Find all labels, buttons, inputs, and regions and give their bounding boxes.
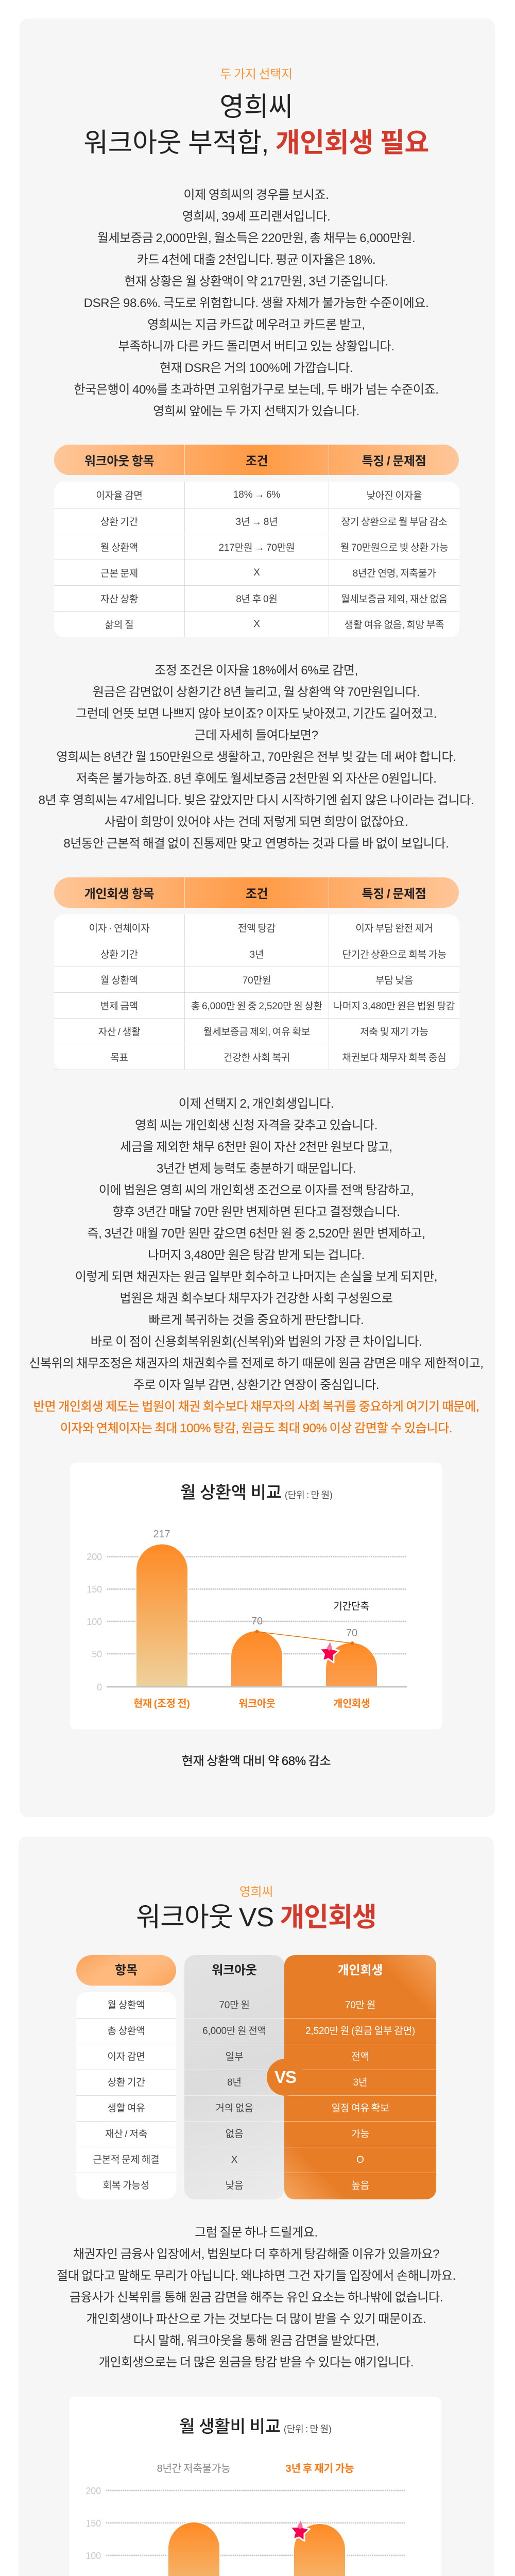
table body: 70만원 <box>243 975 271 986</box>
title: 워크아웃 VS 개인회생: 워크아웃 VS 개인회생 <box>136 1903 376 1933</box>
grid lines and y axis labels <box>85 2486 405 2576</box>
column rows: 2,520만 원 (원금 일부 감면) <box>305 2026 415 2037</box>
text block: 워크아웃 조정 조건: 근데 자세히 들여다보면? <box>194 728 318 742</box>
grid lines and y axis labels: 200 <box>87 1552 102 1562</box>
table body: 총 6,000만 원 중 2,520만 원 상환 <box>191 1001 322 1012</box>
text block: 워크아웃 조정 조건: 8년 후 영희씨는 47세입니다. 빚은 갚았지만 다시 시작하기엔 쉽지 않은 나이라는 겁니다. <box>39 793 474 807</box>
table body: 상환 기간 <box>100 950 138 960</box>
grid lines and y axis labels: 0 <box>97 1682 102 1692</box>
grid lines and y axis labels: 150 <box>85 2518 101 2529</box>
text block: 워크아웃 조정 조건: 그런데 언뜻 보면 나쁘지 않아 보이죠? 이자도 낮아졌고, 기간도 길어졌고. <box>76 707 437 721</box>
table body: 나머지 3,480만 원은 법원 탕감 <box>334 1001 455 1012</box>
table: 개인회생 항목 <box>54 877 459 1070</box>
text block: 금융사 질문: 그럼 질문 하나 드릴게요. <box>195 2226 318 2240</box>
column header: 항목 <box>76 1955 176 1986</box>
grid lines and y axis labels: 200 <box>85 2486 101 2496</box>
comparison table <box>76 1955 436 2199</box>
column rows: 8년 <box>227 2077 242 2088</box>
column rows: 일정 여유 확보 <box>332 2103 389 2114</box>
column header: 워크아웃: 워크아웃 <box>212 1963 257 1977</box>
x axis <box>107 1686 407 1688</box>
text block: 금융사 질문: 다시 말해, 워크아웃을 통해 원금 감면을 받았다면, <box>133 2334 379 2348</box>
grid lines and y axis labels <box>87 1552 406 1692</box>
bar: 워크아웃 70 <box>231 1631 282 1686</box>
text block: 선택지 2 개인회생 설명: 세금을 제외한 채무 6천만 원이 자산 2천만 원보다 많고, <box>120 1140 392 1154</box>
column rows: 70만 원 <box>219 2000 250 2011</box>
column rows: X <box>231 2155 237 2165</box>
column rows: 70만 원 <box>345 2000 375 2011</box>
grid lines and y axis labels: 100 <box>85 2551 101 2561</box>
bar notes <box>157 2463 354 2475</box>
note: 기간단축: 기간단축 <box>333 1601 369 1612</box>
text block: 선택지 2 개인회생 설명: 이에 법원은 영희 씨의 개인회생 조건으로 이자를 전액 탕감하고, <box>99 1183 414 1197</box>
table body: 근본 문제 <box>100 568 138 579</box>
title: 워크아웃 부적합, 개인회생 필요 <box>83 92 429 158</box>
category labels: 워크아웃 <box>238 1698 276 1709</box>
text block: 선택지 2 개인회생 설명: 바로 이 점이 신용회복위원회(신복위)와 법원의 가장 큰 차이입니다. <box>91 1334 422 1349</box>
column rows <box>184 2000 284 2191</box>
text block: 워크아웃 조정 조건 <box>39 664 474 851</box>
bar: 현재 217 <box>136 1544 187 1686</box>
text block: 선택지 2 개인회생 설명: 이렇게 되면 채권자는 원금 일부만 회수하고 나머지는 손실을 보게 되지만, <box>75 1269 437 1284</box>
text block: 워크아웃 조정 조건: 조정 조건은 이자율 18%에서 6%로 감면, <box>154 664 358 677</box>
grid lines and y axis labels: 100 <box>87 1617 102 1627</box>
column rows: 높음 <box>351 2180 369 2191</box>
value labels: 217 <box>153 1529 170 1540</box>
column rows: 총 상환액 <box>107 2026 145 2037</box>
icon: star <box>318 1641 340 1663</box>
bar chart: 월 상환액 비교 <box>87 1483 407 1709</box>
column rows: 없음 <box>226 2129 243 2140</box>
text block: 선택지 2 개인회생 설명: 3년간 변제 능력도 충분하기 때문입니다. <box>157 1161 356 1176</box>
table body: 이자율 감면 <box>96 490 143 501</box>
text block: 금융사 질문: 채권자인 금융사 입장에서, 법원보다 더 후하게 탕감해줄 이유가 있을까요? <box>73 2247 439 2261</box>
text block: 금융사 질문: 개인회생이나 파산으로 가는 것보다는 더 많이 받을 수 있기 때문이죠. <box>87 2312 426 2326</box>
category labels: 개인회생 <box>333 1698 370 1709</box>
text block: 선택지 2 개인회생 설명: 영희 씨는 개인회생 신청 자격을 갖추고 있습니다. <box>135 1118 377 1132</box>
text block: 영희씨 사례: 영희씨, 39세 프리랜서입니다. <box>182 210 330 224</box>
text block: 영희씨 사례 <box>74 188 439 418</box>
panel: 워크아웃 VS 개인회생 <box>19 1837 494 2576</box>
text: 현재 상환액 대비 약 68% 감소: 현재 상환액 대비 약 68% 감소 <box>182 1754 331 1768</box>
column rows: 일부 <box>226 2052 243 2062</box>
value labels: 70 <box>346 1628 357 1639</box>
text block: 선택지 2 개인회생 설명: 향후 3년간 매달 70만 원만 변제하면 된다고 결정했습니다. <box>112 1205 400 1219</box>
table header <box>54 877 459 908</box>
table body: 월 상환액 <box>100 975 138 986</box>
table header: 조건 <box>246 454 268 468</box>
column rows <box>76 1992 176 2199</box>
table body: X <box>253 618 260 630</box>
table body <box>54 482 459 637</box>
table body: 삶의 질 <box>105 620 133 631</box>
table body: 18% → 6% <box>233 489 280 500</box>
column: 개인회생 <box>284 1955 436 2199</box>
table body: 3년 <box>250 950 264 960</box>
column rows: 3년 <box>353 2077 367 2088</box>
table body: 8년 후 0원 <box>236 594 278 605</box>
column rows: 6,000만 원 전액 <box>202 2026 266 2037</box>
text block: 금융사 질문: 개인회생으로는 더 많은 원금을 탕감 받을 수 있다는 얘기입니다. <box>99 2355 414 2369</box>
column rows: 생활 여유 <box>107 2103 145 2114</box>
table body: 월세보증금 제외, 여유 확보 <box>203 1027 310 1038</box>
column: 항목 <box>76 1955 176 2199</box>
table header <box>54 445 459 475</box>
table body: 채권보다 채무자 회복 중심 <box>342 1053 447 1063</box>
bar chart: 월 생활비 비교 <box>85 2417 405 2576</box>
text block: 워크아웃 조정 조건: 영희씨는 8년간 월 150만원으로 생활하고, 70만원은 전부 빚 갚는 데 써야 합니다. <box>57 750 456 764</box>
badge: VS: VS <box>274 2067 296 2087</box>
text block: 선택지 2 개인회생 설명: 법원은 채권 회수보다 채무자가 건강한 사회 구성원으로 <box>120 1291 392 1306</box>
text block: 영희씨 사례: 월세보증금 2,000만원, 월소득은 220만원, 총 채무는 6,000만원. <box>97 231 415 245</box>
table body: 전액 탕감 <box>238 923 276 934</box>
text block: 영희씨 사례: 부족하니까 다른 카드 돌리면서 버티고 있는 상황입니다. <box>118 340 394 353</box>
text block: 금융사 질문: 금융사가 신복위를 통해 원금 감면을 해주는 유인 요소는 하나밖에 없습니다. <box>70 2291 443 2304</box>
column rows: 전액 <box>351 2052 369 2062</box>
table header: 개인회생 항목 <box>84 887 154 901</box>
title: 워크아웃 부적합, 개인회생 필요: 워크아웃 부적합, 개인회생 필요 <box>83 128 429 158</box>
table body <box>54 914 459 1070</box>
bar: 개인회생 70 <box>326 1643 377 1686</box>
text block: 영희씨 사례: 영희씨 앞에는 두 가지 선택지가 있습니다. <box>153 404 359 418</box>
bar notes: 3년 후 재기 가능 <box>286 2463 354 2475</box>
text block: 선택지 2 개인회생 설명 <box>29 1096 484 1435</box>
table body: 8년간 연명, 저축불가 <box>353 568 436 579</box>
text block: 워크아웃 조정 조건: 사람이 희망이 있어야 사는 건데 저렇게 되면 희망이 없잖아요. <box>105 815 408 829</box>
text block: 선택지 2 개인회생 설명: 이제 선택지 2, 개인회생입니다. <box>179 1096 334 1111</box>
text block: 선택지 2 개인회생 설명: 반면 개인회생 제도는 법원이 채권 회수보다 채무자의 사회 복귀를 중요하게 여기기 때문에, <box>33 1399 479 1414</box>
column rows: O <box>356 2155 364 2165</box>
text block: 금융사 질문 <box>57 2226 456 2369</box>
text block: 영희씨 사례: 영희씨는 지금 카드값 메우려고 카드론 받고, <box>147 318 365 332</box>
text block: 워크아웃 조정 조건: 저축은 불가능하죠. 8년 후에도 월세보증금 2천만원 외 자산은 0원입니다. <box>76 772 437 786</box>
table body: 이자 부담 완전 제거 <box>355 923 433 934</box>
table body: 저축 및 재기 가능 <box>360 1027 428 1038</box>
bar: 워크아웃 <box>168 2522 219 2576</box>
text block: 선택지 2 개인회생 설명: 빠르게 복귀하는 것을 중요하게 판단합니다. <box>149 1313 364 1327</box>
chart card: 월 상환액 비교 <box>70 1463 442 1730</box>
column rows: 낮음 <box>226 2180 243 2191</box>
text block: 워크아웃 조정 조건: 8년동안 근본적 해결 없이 진통제만 맞고 연명하는 것과 다를 바 없이 보입니다. <box>63 837 449 851</box>
table body: 부담 낮음 <box>375 975 413 986</box>
chart title: 월 생활비 비교 (단위 : 만 원) <box>179 2417 332 2436</box>
text block: 영희씨 사례: 현재 DSR은 거의 100%에 가깝습니다. <box>160 361 353 375</box>
table header: 워크아웃 항목 <box>84 454 154 468</box>
table body: 월 상환액 <box>100 543 138 553</box>
text block: 금융사 질문: 절대 없다고 말해도 무리가 아닙니다. 왜냐하면 그건 자기들 입장에서 손해니까요. <box>57 2269 456 2283</box>
table body: 217만원 → 70만원 <box>219 543 295 553</box>
table body: 이자 · 연체이자 <box>89 923 149 934</box>
column rows: 이자 감면 <box>107 2052 145 2062</box>
value labels <box>153 1529 357 1639</box>
column rows <box>284 2000 436 2191</box>
table body: 월세보증금 제외, 재산 없음 <box>341 594 448 605</box>
column rows: 재산 / 저축 <box>105 2129 147 2140</box>
table body: 자산 상황 <box>100 594 138 605</box>
table body: 장기 상환으로 월 부담 감소 <box>341 517 447 528</box>
column rows: 거의 없음 <box>215 2103 253 2114</box>
table body: 단기간 상환으로 회복 가능 <box>342 950 447 960</box>
value labels: 70 <box>251 1616 263 1627</box>
icon: star <box>289 2519 311 2541</box>
column header: 개인회생: 개인회생 <box>338 1963 383 1977</box>
column header: 항목: 항목 <box>115 1963 138 1977</box>
bar: 개인회생 <box>294 2524 345 2576</box>
table body: 변제 금액 <box>100 1001 138 1012</box>
table body: X <box>253 567 260 578</box>
table header: 특징 / 문제점 <box>362 887 426 901</box>
text block: 영희씨 사례: 현재 상황은 월 상환액이 약 217만원, 3년 기준입니다. <box>124 275 388 289</box>
table: 워크아웃 항목 <box>54 445 459 637</box>
kicker: 두 가지 선택지: 두 가지 선택지 <box>220 67 293 81</box>
table body: 월 70만원으로 빚 상환 가능 <box>340 543 448 553</box>
text block: 영희씨 사례: DSR은 98.6%. 극도로 위험합니다. 생활 자체가 불가능한 수준이에요. <box>84 296 428 310</box>
category labels <box>133 1698 370 1709</box>
text block: 영희씨 사례: 이제 영희씨의 경우를 보시죠. <box>183 188 329 202</box>
column rows: 근본적 문제 해결 <box>93 2155 159 2165</box>
kicker: 영희씨: 영희씨 <box>239 1885 273 1899</box>
bar notes: 8년간 저축불가능 <box>157 2463 230 2475</box>
text block: 선택지 2 개인회생 설명: 주로 이자 일부 감면, 상환기간 연장이 중심입니다. <box>133 1378 379 1392</box>
table body: 3년 → 8년 <box>235 517 278 528</box>
table body: 낮아진 이자율 <box>367 490 422 501</box>
text block: 워크아웃 조정 조건: 원금은 감면없이 상환기간 8년 늘리고, 월 상환액 약 70만원입니다. <box>93 685 420 699</box>
title: 워크아웃 부적합, 개인회생 필요: 영희씨 <box>219 92 293 122</box>
table body: 목표 <box>110 1053 128 1063</box>
trend line <box>255 1630 354 1645</box>
grid lines and y axis labels: 50 <box>92 1649 102 1659</box>
text block: 영희씨 사례: 한국은행이 40%를 초과하면 고위험가구로 보는데, 두 배가 넘는 수준이죠. <box>74 383 439 397</box>
text block: 선택지 2 개인회생 설명: 즉, 3년간 매월 70만 원만 갚으면 6천만 원 중 2,520만 원만 변제하고, <box>87 1226 425 1241</box>
chart card: 월 생활비 비교 <box>69 2397 441 2576</box>
table body: 건강한 사회 복귀 <box>224 1053 290 1063</box>
panel: 영희씨 워크아웃 부적합 <box>20 19 495 1817</box>
grid lines and y axis labels: 150 <box>87 1584 102 1595</box>
column rows: 상환 기간 <box>107 2077 145 2088</box>
column rows: 월 상환액 <box>107 2000 145 2011</box>
table body: 생활 여유 없음, 희망 부족 <box>345 620 444 631</box>
text block: 선택지 2 개인회생 설명: 나머지 3,480만 원은 탕감 받게 되는 겁니다. <box>148 1248 365 1262</box>
badge: VS <box>267 2059 304 2096</box>
column rows: 회복 가능성 <box>103 2180 149 2191</box>
text block: 영희씨 사례: 카드 4천에 대출 2천입니다. 평균 이자율은 18%. <box>137 253 375 267</box>
table header: 조건 <box>246 887 268 901</box>
table body: 자산 / 생활 <box>98 1027 141 1038</box>
table header: 특징 / 문제점 <box>362 454 426 468</box>
text block: 선택지 2 개인회생 설명: 이자와 연체이자는 최대 100% 탕감, 원금도 최대 90% 이상 감면할 수 있습니다. <box>60 1421 452 1435</box>
category labels: 현재 (조정 전) <box>133 1698 190 1709</box>
column: 워크아웃 <box>184 1955 284 2199</box>
text block: 선택지 2 개인회생 설명: 신복위의 채무조정은 채권자의 채권회수를 전제로 하기 때문에 원금 감면은 매우 제한적이고, <box>29 1356 484 1370</box>
column rows: 가능 <box>351 2129 369 2140</box>
chart title: 월 상환액 비교 (단위 : 만 원) <box>180 1483 333 1502</box>
table body: 상환 기간 <box>100 517 138 528</box>
